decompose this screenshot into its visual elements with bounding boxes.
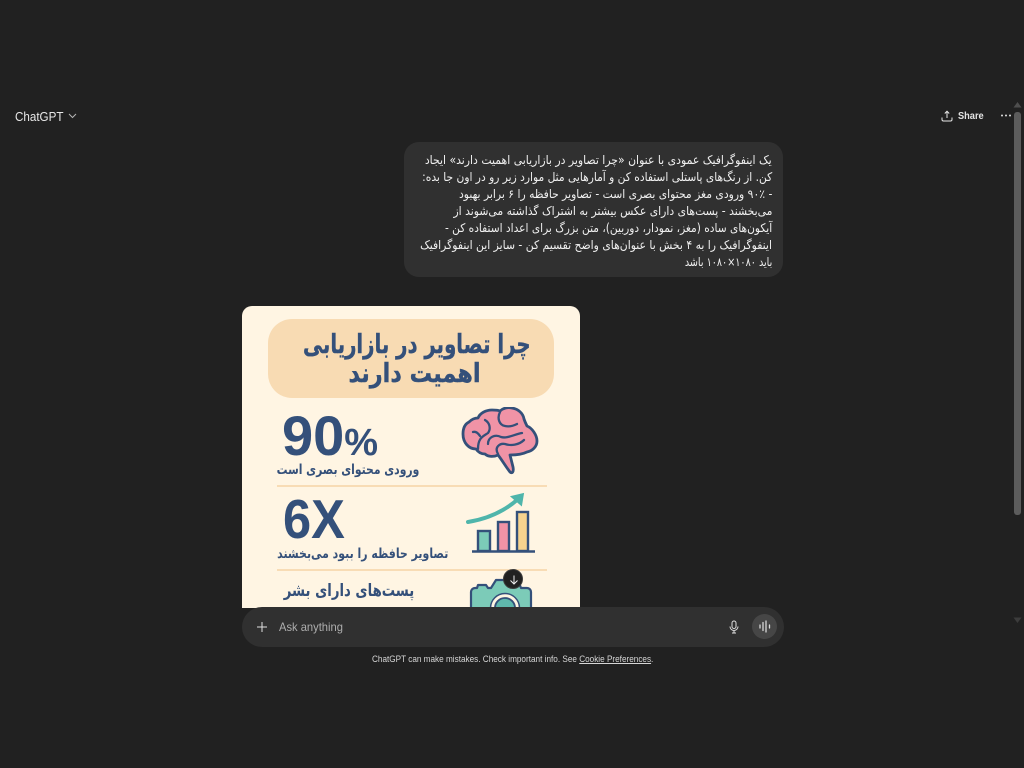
stat: 90%: 90 bbox=[282, 404, 344, 467]
user message bubble: آیکون‌های ساده (مغز، نمودار، دوربین)، متن بزرگ برای اعداد استفاده کن - bbox=[445, 221, 772, 235]
header: share button: Share bbox=[958, 110, 984, 122]
icon: camera bbox=[470, 578, 532, 607]
icon: brain bbox=[462, 407, 538, 474]
message input bar bbox=[242, 607, 784, 647]
user message bubble: یک اینفوگرافیک عمودی با عنوان «چرا تصاویر در بازاریابی اهمیت دارند» ایجاد bbox=[425, 153, 772, 167]
icon: microphone bbox=[730, 620, 738, 634]
scrollbar bbox=[1014, 102, 1022, 623]
user message bubble: می‌بخشند - پست‌های دارای عکس بیشتر به اشتراک گذاشته می‌شوند از bbox=[453, 204, 772, 218]
header: model selector: ChatGPT bbox=[15, 110, 63, 124]
header: more options bbox=[1001, 114, 1011, 116]
title banner: چرا تصاویر در بازاریابی bbox=[303, 330, 530, 360]
stat: 90%: % bbox=[344, 422, 378, 464]
user message bubble: باید ۱۰۸۰×۱۰۸۰ باشد bbox=[685, 255, 772, 269]
scroll to bottom button bbox=[503, 569, 523, 589]
user message bubble: - ۹۰٪ ورودی مغز محتوای بصری است - تصاویر حافظه را ۶ برابر بهبود bbox=[459, 187, 772, 201]
stat: 6X: تصاویر حافظه را ببود می‌بخشند bbox=[277, 546, 448, 562]
title banner: اهمیت دارند bbox=[349, 359, 481, 389]
icon: plus bbox=[257, 622, 267, 632]
stat: 6X: 6X bbox=[282, 488, 344, 550]
stat: 90%: ورودی محتوای بصری است bbox=[276, 462, 419, 478]
header: share button bbox=[942, 110, 984, 122]
divider bbox=[277, 485, 547, 487]
title banner bbox=[268, 319, 554, 398]
disclaimer footer: ChatGPT can make mistakes. Check important info. See Cookie Preferences. bbox=[372, 654, 653, 664]
user message bubble bbox=[404, 142, 783, 277]
input placeholder: Ask anything bbox=[279, 620, 343, 634]
icon: voice mode bbox=[752, 614, 777, 639]
user message bubble: کن. از رنگ‌های پاستلی استفاده کن و آمارهایی مثل موارد زیر رو در اون جا بده: bbox=[422, 170, 772, 184]
stat: posts text: پست‌های دارای بشر bbox=[284, 581, 414, 601]
infographic card bbox=[242, 306, 580, 608]
stat: 6X bbox=[277, 488, 448, 562]
user message bubble: اینفوگرافیک را به ۴ بخش با عنوان‌های واضح تقسیم کن - سایز این اینفوگرافیک bbox=[420, 238, 772, 252]
icon: rising bar chart bbox=[466, 492, 535, 553]
divider bbox=[277, 569, 547, 571]
stat: 90% bbox=[276, 404, 419, 478]
